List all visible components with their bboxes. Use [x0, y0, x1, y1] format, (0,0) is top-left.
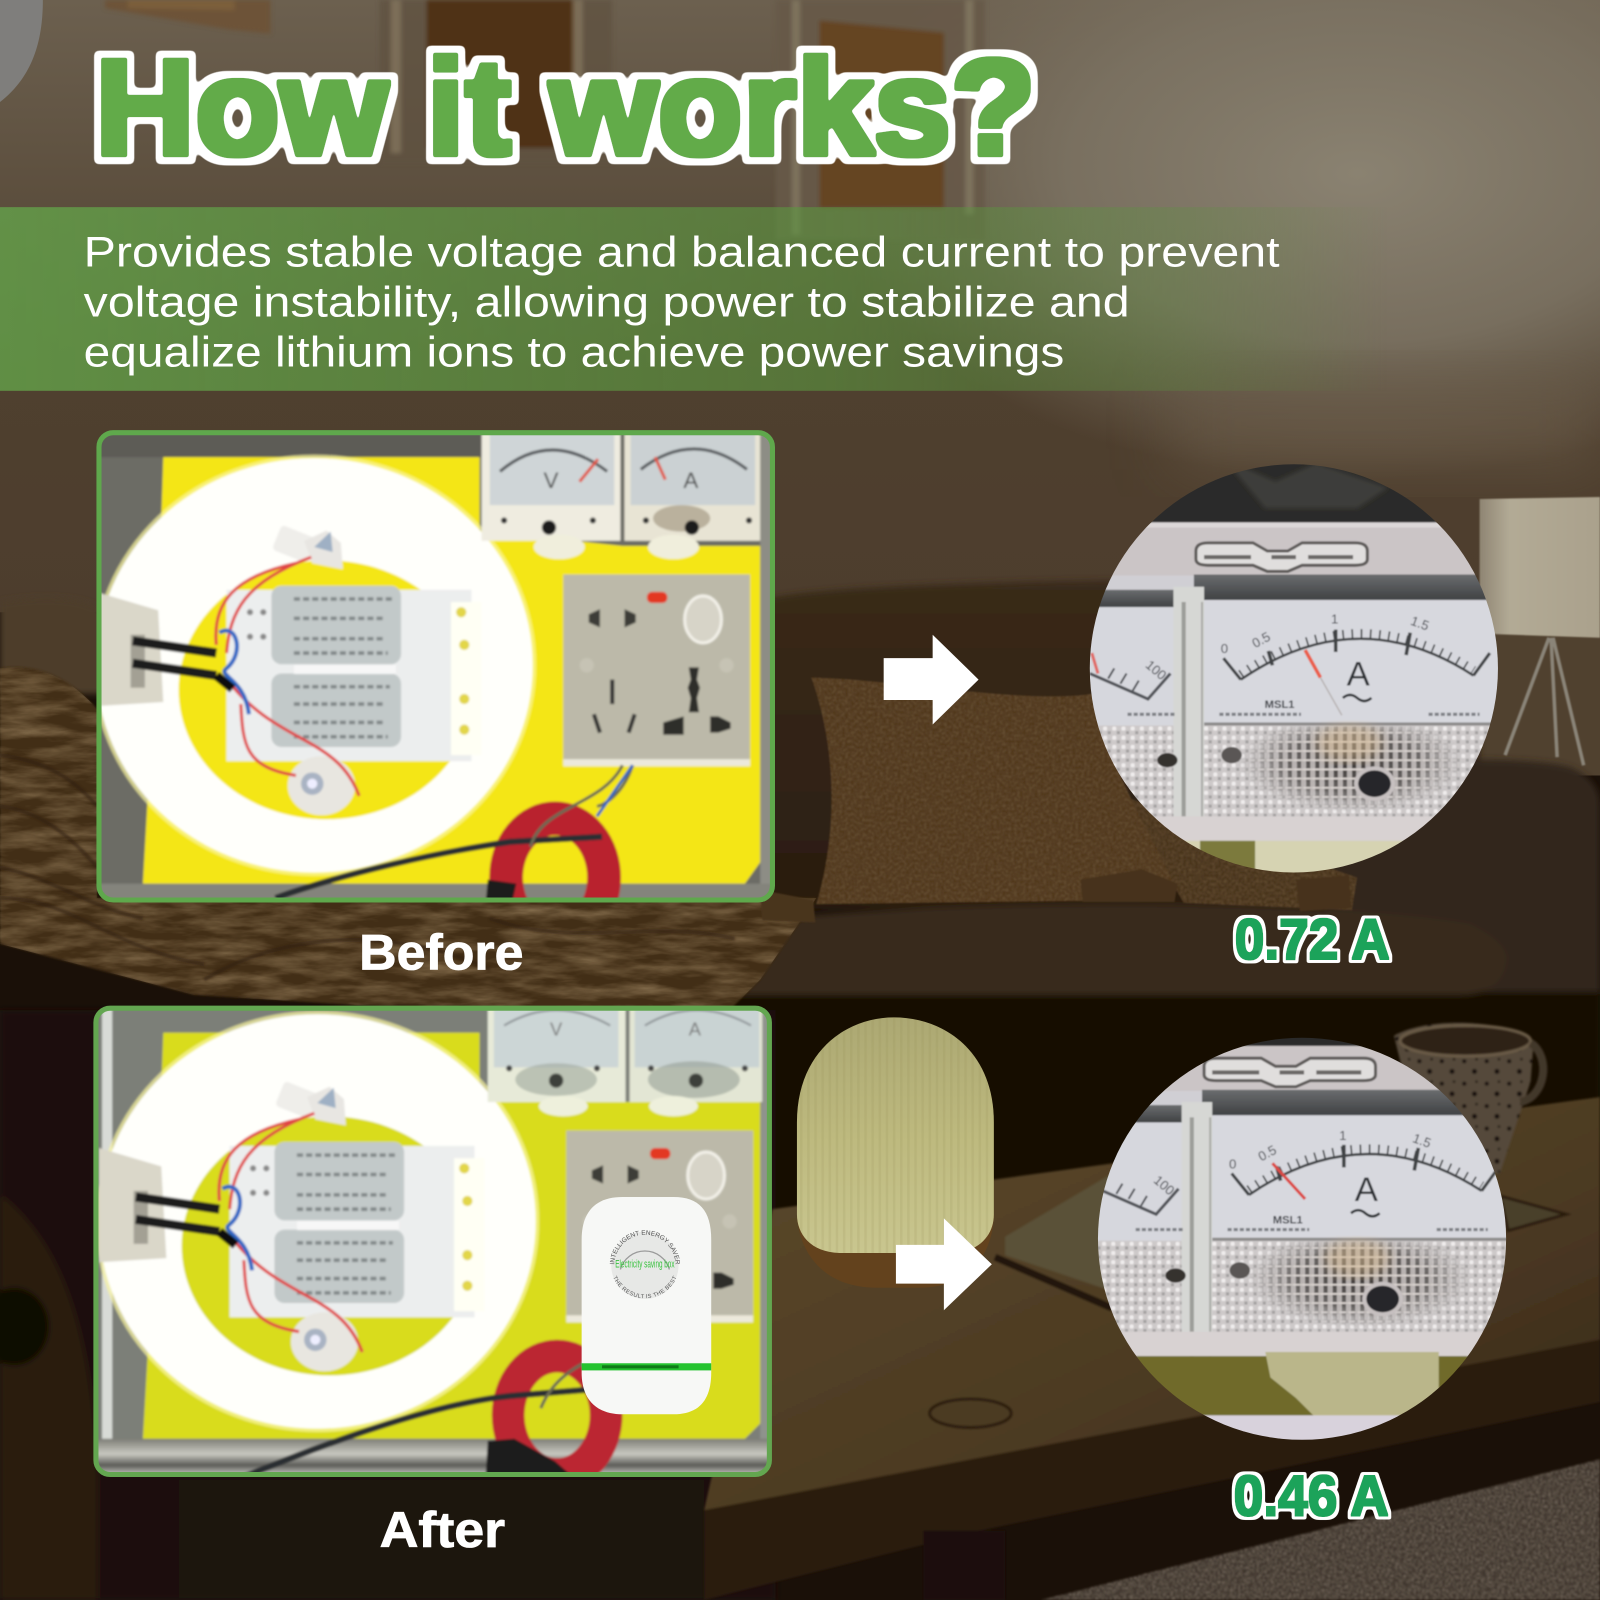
voltmeter: V: [544, 468, 559, 493]
gauge: after reading: 100: [1151, 1172, 1177, 1198]
gauge: after reading: 1: [1339, 1128, 1347, 1143]
description text: equalize lithium ions to achieve power savings: [84, 328, 1064, 376]
gauge: before reading: 1: [1331, 611, 1338, 626]
table lamp: [797, 1017, 994, 1288]
faded voltmeter: V: [550, 1019, 563, 1040]
label: After: After: [380, 1502, 505, 1558]
gauge: before reading: 0: [1221, 641, 1228, 656]
heading: How it works?: How it works?: [95, 31, 1036, 183]
value: 0.46 A: 0.46 A: [1234, 1464, 1389, 1528]
gauge: before reading: 100: [1143, 657, 1169, 683]
floor lamp: [1480, 497, 1600, 765]
faded voltmeter: [488, 1008, 626, 1116]
description text: Provides stable voltage and balanced current to prevent: [84, 228, 1280, 276]
faded ammeter: [630, 1008, 762, 1116]
blanket: [0, 667, 816, 1010]
gauge: after reading: 1.5: [1411, 1130, 1433, 1151]
gauge: after reading: 0.5: [1256, 1142, 1279, 1164]
pillows: [760, 678, 1357, 922]
icon: current clamp: [486, 818, 604, 937]
panel: before photo: [95, 431, 774, 937]
arrow: before reading: [884, 635, 979, 724]
voltmeter: [482, 434, 620, 559]
sofa: [0, 580, 1600, 1600]
mug: [1394, 1023, 1543, 1173]
description text: [84, 228, 1280, 376]
gauge: after reading: [1090, 1031, 1520, 1449]
arrow: after reading: [896, 1218, 992, 1310]
product: electricity saving box: THE RESULT IS THE BEST: [614, 1276, 676, 1298]
product: electricity saving box: INTELLIGENT ENERGY SAVER: [610, 1230, 680, 1264]
coffee table: [704, 1097, 1600, 1600]
gauge: before reading: [1082, 459, 1510, 888]
gauge: after reading: 0: [1229, 1156, 1236, 1171]
value: 0.72 A: 0.72 A: [1235, 908, 1390, 972]
description text: voltage instability, allowing power to stabilize and: [84, 278, 1130, 326]
ammeter: A: [683, 468, 698, 493]
description band: [0, 207, 1388, 391]
panel: after photo: [93, 1006, 772, 1477]
ammeter: [624, 434, 760, 559]
faded ammeter: A: [689, 1019, 702, 1040]
gauge: after reading: A: [1355, 1171, 1379, 1209]
label: Before: Before: [359, 924, 523, 980]
gauge: after reading: MSL1: [1273, 1214, 1303, 1226]
gauge: before reading: A: [1347, 656, 1371, 694]
product: electricity saving box: Electricity saving box: [615, 1258, 675, 1270]
icon: current clamp: [486, 1356, 606, 1476]
gauge: before reading: 1.5: [1409, 613, 1431, 634]
product: electricity saving box: [582, 1197, 712, 1414]
gauge: before reading: MSL1: [1265, 699, 1295, 711]
gauge: before reading: 0.5: [1249, 629, 1273, 651]
